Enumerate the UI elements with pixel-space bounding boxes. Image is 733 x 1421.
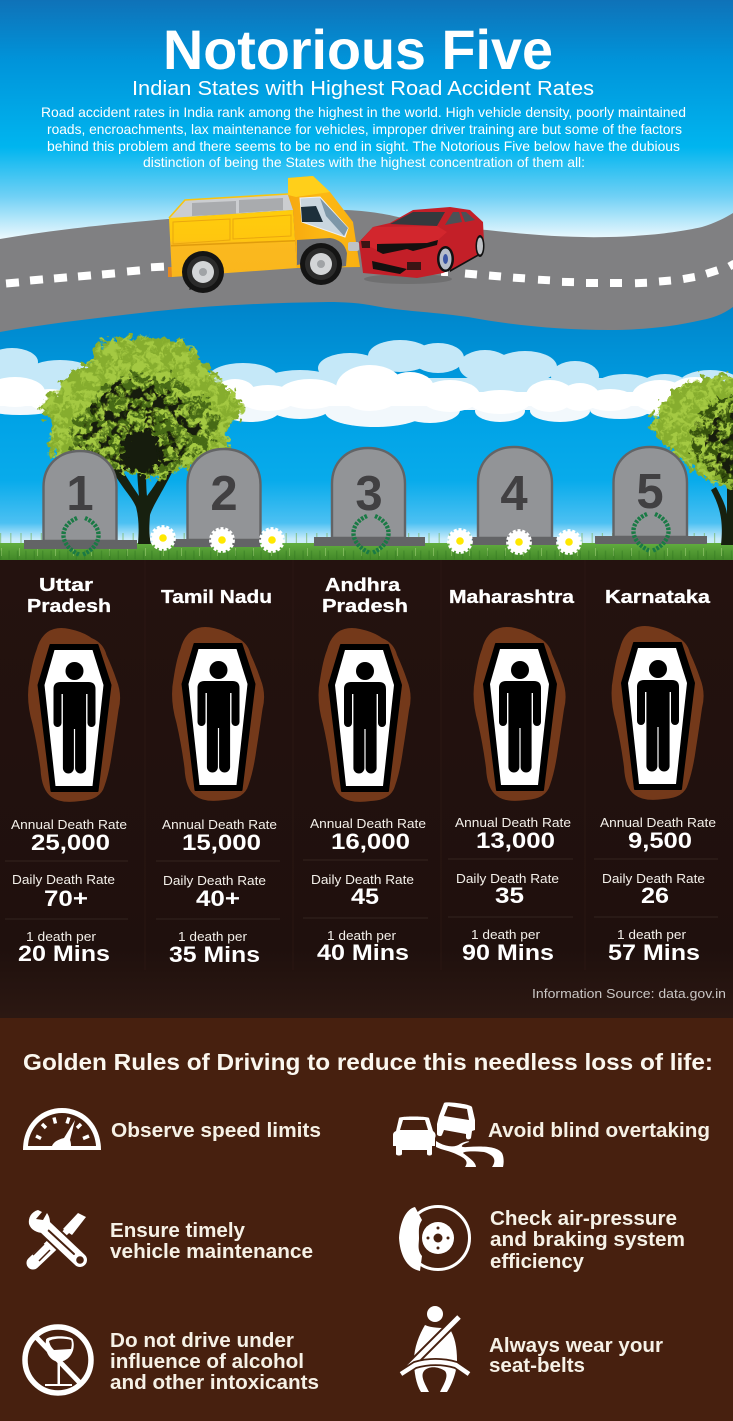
- gravestone 3: 3: [355, 467, 383, 521]
- column: Tamil Nadu: 15,000: [182, 830, 261, 855]
- column: Andhra Pradesh: 40 Mins: [317, 940, 409, 965]
- grass: [0, 539, 733, 561]
- column: Maharashtra: Maharashtra: [449, 587, 575, 607]
- column: Andhra Pradesh: 16,000: [331, 829, 410, 854]
- column: Uttar Pradesh: Pradesh: [27, 596, 111, 616]
- column: Maharashtra: 90 Mins: [462, 940, 554, 965]
- intro paragraph: Road accident rates in India rank among the highest in the world. High vehicle density, poorly maintained: [41, 105, 686, 120]
- rule: alcohol: Do not drive under: [110, 1330, 294, 1352]
- gravestone 2: 2: [210, 467, 238, 521]
- column: Karnataka: 9,500: [628, 828, 692, 853]
- column: Tamil Nadu: Annual Death Rate: [162, 818, 277, 832]
- gravestone 5: [595, 447, 707, 551]
- road lane dashes: [6, 260, 733, 288]
- column: Tamil Nadu: 35 Mins: [169, 942, 260, 967]
- icon: no alcohol: [25, 1327, 91, 1393]
- icon: crashed red car: [359, 207, 484, 284]
- gravestone 4: 4: [500, 467, 528, 521]
- icon: overtaking cars: [393, 1102, 504, 1167]
- rule: alcohol: [110, 1330, 319, 1394]
- column: Andhra Pradesh: Pradesh: [322, 596, 408, 616]
- road: [0, 209, 733, 332]
- rule: air pressure: [490, 1208, 685, 1273]
- gravestone 2: [174, 449, 260, 547]
- icon: yellow truck: [168, 176, 360, 293]
- intro paragraph: roads, encroachments, lax maintenance for vehicles, improper driver training are but some of the factors: [47, 122, 682, 137]
- column: Uttar Pradesh: [11, 575, 127, 966]
- rule: observe speed limits: Observe speed limits: [111, 1120, 321, 1142]
- column: Karnataka: 1 death per: [617, 928, 686, 942]
- foreground cloud layer: [0, 365, 733, 427]
- column: Andhra Pradesh: Andhra: [325, 575, 401, 595]
- subtitle: Indian States with Highest Road Accident Rates: [132, 77, 594, 100]
- rule: alcohol: and other intoxicants: [110, 1372, 319, 1394]
- gravestone 4: [472, 447, 557, 545]
- gravestone 3: [314, 448, 425, 553]
- rule: air pressure: efficiency: [490, 1251, 585, 1273]
- column: Tamil Nadu: 1 death per: [178, 930, 247, 944]
- icon: wrench and screwdriver: [29, 1210, 86, 1264]
- column: Andhra Pradesh: [310, 575, 426, 965]
- intro paragraph: distinction of being the States with the highest concentration of them all:: [143, 155, 585, 170]
- column: Andhra Pradesh: Annual Death Rate: [310, 817, 426, 831]
- column: Karnataka: 57 Mins: [608, 940, 700, 965]
- icon: brake disc: [399, 1206, 470, 1271]
- gravestone 1: [24, 451, 137, 555]
- gravestone 5: 5: [636, 465, 664, 519]
- column: Maharashtra: [449, 587, 575, 965]
- rule: vehicle maintenance: vehicle maintenance: [110, 1241, 313, 1263]
- source note: Information Source: data.gov.in: [532, 986, 726, 1001]
- column: Maharashtra: 1 death per: [471, 928, 540, 942]
- column: Andhra Pradesh: 1 death per: [327, 929, 396, 943]
- icon: speedometer: [23, 1108, 101, 1150]
- tree right: [652, 376, 733, 545]
- column: Maharashtra: Annual Death Rate: [455, 816, 571, 830]
- rule: vehicle maintenance: [110, 1220, 313, 1263]
- column: Andhra Pradesh: Daily Death Rate: [311, 873, 414, 887]
- column: Uttar Pradesh: 70+: [44, 886, 88, 911]
- intro paragraph: behind this problem and there seems to be no end in sight. The Notorious Five below have the dubious: [47, 139, 680, 154]
- column: Uttar Pradesh: 20 Mins: [18, 941, 110, 966]
- column: Uttar Pradesh: Uttar: [39, 575, 93, 595]
- background cloud layer: [0, 340, 733, 400]
- intro paragraph: [41, 105, 686, 170]
- column: Tamil Nadu: [161, 587, 277, 967]
- panel: state statistics: [0, 560, 733, 1018]
- column: Maharashtra: 35: [495, 883, 524, 908]
- rule: seat belts: Always wear your: [489, 1335, 663, 1357]
- column: Maharashtra: Daily Death Rate: [456, 872, 559, 886]
- column: Tamil Nadu: Daily Death Rate: [163, 874, 266, 888]
- golden rules heading: Golden Rules of Driving to reduce this needless loss of life:: [23, 1049, 713, 1075]
- rule: seat belts: [489, 1335, 663, 1377]
- column: Uttar Pradesh: 25,000: [31, 830, 110, 855]
- title: Notorious Five: [163, 18, 553, 81]
- tree left: [39, 336, 245, 544]
- column: Maharashtra: 13,000: [476, 828, 555, 853]
- upper sky background: [0, 0, 733, 245]
- column: Tamil Nadu: Tamil Nadu: [161, 587, 272, 607]
- column: Karnataka: [600, 587, 716, 965]
- column: Andhra Pradesh: 45: [351, 884, 379, 909]
- column: Uttar Pradesh: Annual Death Rate: [11, 818, 127, 832]
- icon: seat belt: [401, 1306, 469, 1392]
- rule: air pressure: Check air-pressure: [490, 1208, 677, 1230]
- column: Tamil Nadu: 40+: [196, 886, 240, 911]
- column: Uttar Pradesh: Daily Death Rate: [12, 873, 115, 887]
- column: Karnataka: Daily Death Rate: [602, 872, 705, 886]
- rule: alcohol: influence of alcohol: [110, 1351, 304, 1373]
- column: Karnataka: Karnataka: [605, 587, 711, 607]
- gravestone 1: 1: [66, 467, 94, 521]
- rule: seat belts: seat-belts: [489, 1355, 585, 1377]
- rule: vehicle maintenance: Ensure timely: [110, 1220, 246, 1242]
- flowers: [151, 526, 581, 554]
- panel: golden rules: [0, 1018, 733, 1421]
- column: Uttar Pradesh: 1 death per: [26, 930, 96, 944]
- lower sky background: [0, 295, 733, 560]
- rule: overtaking: Avoid blind overtaking: [488, 1120, 710, 1142]
- column: Karnataka: 26: [641, 883, 669, 908]
- column: Karnataka: Annual Death Rate: [600, 816, 716, 830]
- rule: air pressure: and braking system: [490, 1229, 685, 1251]
